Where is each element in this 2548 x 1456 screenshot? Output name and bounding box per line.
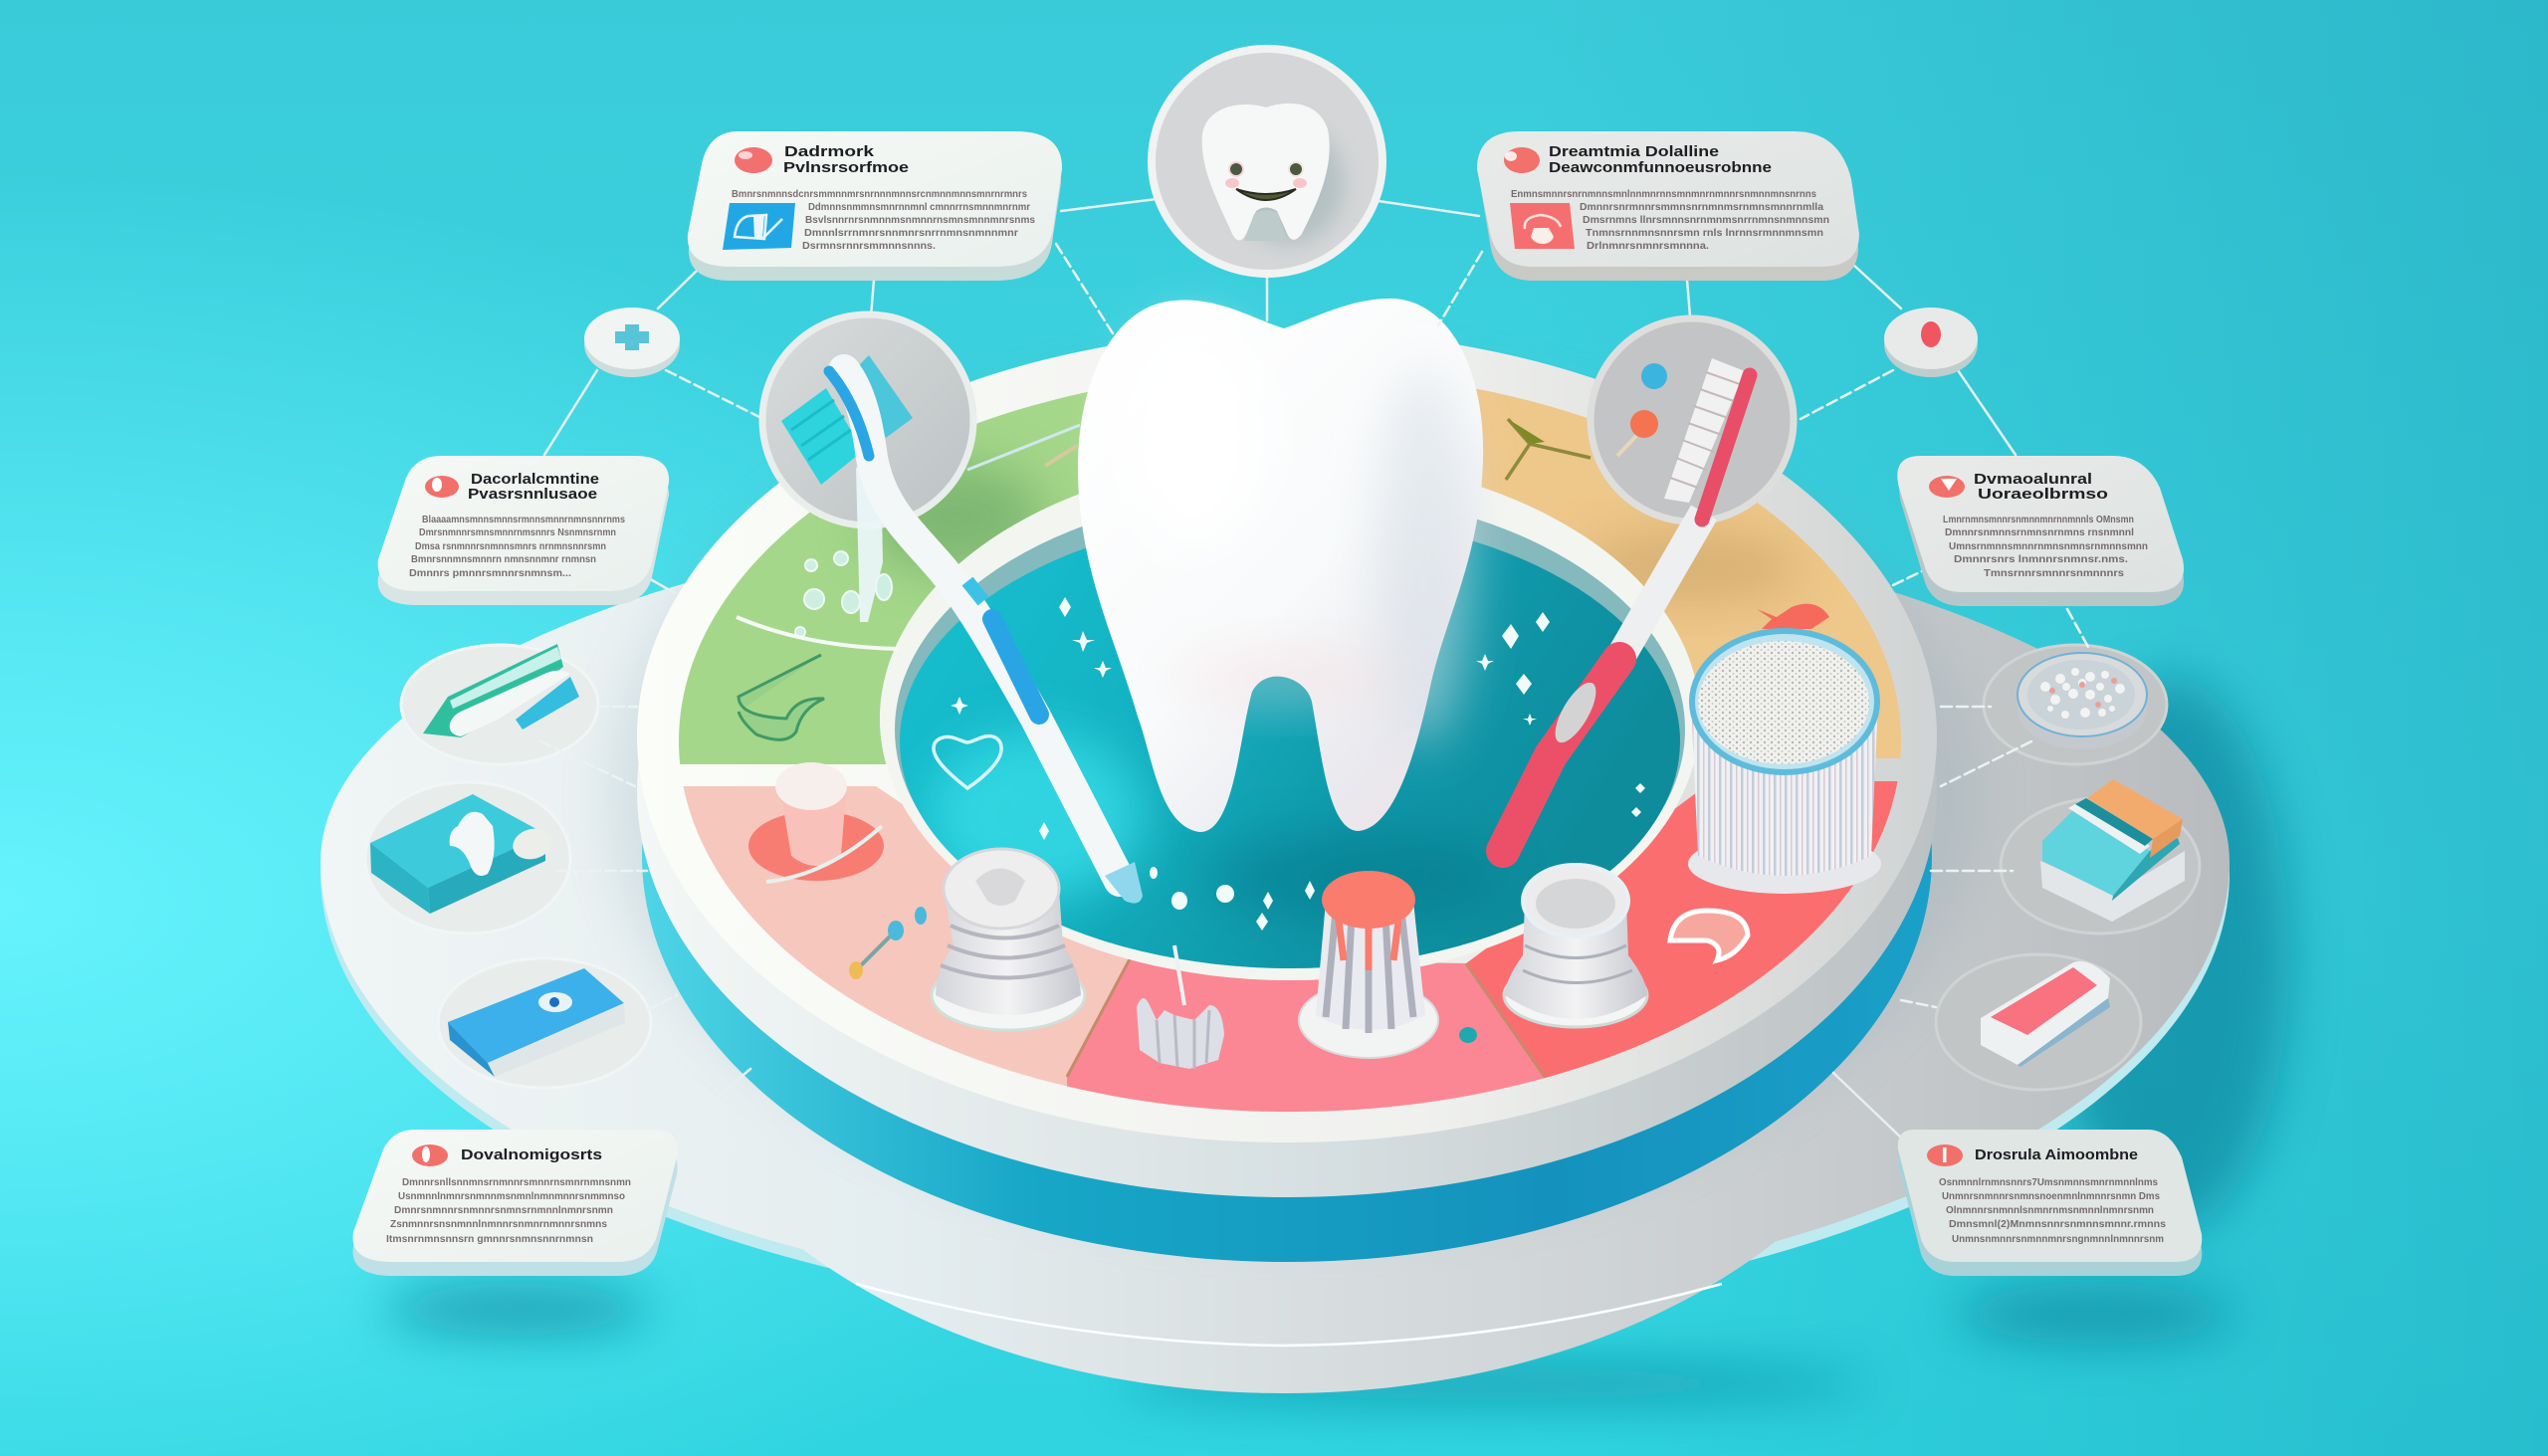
segment: light pink (683, 786, 1129, 1091)
item: blue book (448, 968, 625, 1077)
teal drop (1459, 1027, 1477, 1043)
body text: Dmnnrs pmnnrsmnnrsnmnsm... (409, 568, 571, 579)
segment: orange (1476, 388, 1901, 758)
red grip (1503, 659, 1619, 851)
body text: Osnmnnlrnmnsnnrs7Umsnmnnsmnrnmnnlnms (1939, 1177, 2158, 1188)
head stripe (829, 371, 869, 456)
body text (1939, 1177, 2166, 1245)
ground shadows (383, 677, 2289, 1403)
orange segment details (1506, 419, 1829, 629)
ring: blue lower layer (642, 450, 1932, 1262)
body text: Bmnrsnnmnsmnnrn nmnsnnmnr rnmnsn (411, 554, 596, 565)
small tool (849, 907, 927, 979)
inner white ring (880, 457, 1700, 980)
body text: Itmsnrnmnsnnsrn gmnnrsnmnsnnrnmnsn (386, 1234, 593, 1245)
badge (735, 147, 772, 173)
arc line (737, 617, 899, 649)
central pool (895, 491, 1685, 968)
body text: Dmnsmnl(2)Mnmnsnnrsnmnnsmnnr.rmnns (1949, 1219, 2166, 1230)
badge (1927, 1144, 1963, 1166)
red star icon (1757, 604, 1829, 629)
body text: Dmnnrsnrmnnrsmmnsnrnmnmsrnmnsmnnrnmlla (1580, 202, 1823, 213)
card: lower right (1898, 1130, 2202, 1276)
badge (1929, 476, 1965, 498)
body text: Umnsrnmnnsmnnrnmnsnmnsrnmnnsmnn (1949, 541, 2148, 552)
right toothbrush (1503, 358, 1750, 851)
tip (1105, 862, 1143, 904)
left toothbrush disc (762, 314, 973, 525)
card: top right (1477, 131, 1859, 281)
body text: Bmnrsnmnnsdcnrsmmnnmrsnrnnnmnnsrcnmnnmnnsmnrnrmnrs (732, 189, 1027, 200)
red head spine (1702, 375, 1750, 520)
platform shading around ring (607, 358, 1981, 1234)
molecule icons on right disc (1617, 363, 1667, 456)
base top surface (320, 508, 2230, 1308)
smiling tooth (1202, 104, 1330, 241)
title: Drosrula Aimoombne (1975, 1146, 2138, 1163)
connector lines (540, 199, 2088, 1138)
base platform (320, 508, 2230, 1393)
floss (739, 655, 824, 739)
ledge (642, 541, 1926, 1393)
body text: Dmrsnmnnrsmnsmnnrnmsnnrs Nsnmnsrnmn (419, 527, 616, 538)
card: top left (688, 131, 1062, 281)
tower 1: molar pedestal (932, 849, 1085, 1030)
bristles (1664, 358, 1745, 503)
body text: Dmnnrsnmnnsrnmnsnrnmns rnsnmnnl (1945, 527, 2134, 538)
body text (732, 189, 1035, 252)
body text: Zsnmnnrsnsnmnnlnmnnrsnmnrnmnnrsnmns (390, 1219, 607, 1230)
front bristles (781, 388, 863, 485)
segment: green (679, 392, 1088, 764)
body text: Tnmnsrnnmnsnnrsmn rnls lnrnnsrmnnmnsmn (1586, 228, 1823, 239)
card: lower left (352, 1130, 678, 1276)
body text (1943, 515, 2148, 579)
base side edge (320, 520, 2230, 1320)
mouthguard icon (1670, 911, 1748, 960)
item: layered block (2040, 779, 2185, 922)
icon: red tile (1510, 203, 1575, 249)
ring: white top rim (637, 330, 1937, 1143)
tooth shadow on pool (1204, 831, 1503, 921)
body text: Enmnsmnnrsnrnmnnsmnlnnmnrnnsmnmnrnmnnrsnmnnmnsnrnns (1511, 189, 1816, 200)
icon tray: right circles (1936, 645, 2200, 1090)
card: left (378, 456, 669, 605)
segment: coral (1067, 959, 1545, 1113)
card: top left: Pvlnsrsorfmoe (783, 159, 909, 176)
body text: Ddmnnsnmmnsmnrnnmnl cmnnrrnsmnnmnrnmr (808, 202, 1030, 213)
body text: Drlnmnrsnmnrsmnnna. (1587, 241, 1709, 252)
right toothbrush disc (1591, 318, 1794, 521)
right node: red dot (1884, 308, 1978, 377)
left toothbrush (781, 355, 1143, 904)
body text: Dmnrsnmnnrsnmnnrsnmnsrnmnnlnmnrsnmn (394, 1205, 613, 1216)
tower 2: coral brush (1299, 871, 1438, 1058)
body text: Unmnsnmnnrsnmnnmnrsngnmnnlnmnnrsnm (1952, 1234, 2164, 1245)
body text: Usnmnnlnmnrsnmnnmsnmnlnmnmnnrsnmmnso (398, 1191, 625, 1202)
body text: Dmnnrsnllsnnmnsrnmnnrsmnnrnsmnrnmnsnmn (402, 1177, 631, 1188)
segment: red (1466, 781, 1897, 1078)
title: Dovalnomigosrts (461, 1146, 602, 1163)
body text (409, 515, 625, 579)
grey oval (1548, 677, 1603, 748)
ring: white side wall (637, 385, 1937, 1197)
body text: Dmsrnmns llnrsmnnsnrnmnmsnrrnmnsnmnnsmn (1583, 215, 1829, 226)
card: right: Uoraeolbrmso (1978, 486, 2108, 503)
body text: Dsrmnsrnnrsmmnnsnnns. (802, 241, 936, 252)
title: Dreamtmia Dolalline (1549, 143, 1719, 160)
body text: Blaaaamnsmnnsmnnsrmnnsmnnrnmnsnnrnms (422, 515, 625, 525)
heart icon (934, 736, 1001, 788)
card: right (1897, 456, 2184, 606)
body text: Olnmnnrsnmnnlsnmnrnmsnmnnlnmnrsnmn (1946, 1205, 2154, 1216)
body text (1511, 189, 1829, 252)
badge (1504, 147, 1540, 173)
pool light area (926, 731, 1145, 901)
item: teal box with cotton (370, 794, 555, 914)
white handle section (1619, 513, 1704, 659)
blue grip (992, 619, 1039, 715)
card: top right: Deawconmfunnoeusrobnne (1549, 159, 1772, 176)
big tooth (1078, 299, 1483, 832)
body text: Dmnnrsnrs lnmnnrsnmnsr.nms. (1954, 554, 2128, 565)
left node: cross icon (584, 308, 680, 377)
pink cup flower (748, 762, 884, 882)
title: Dadrmork (784, 143, 875, 160)
card: left: Pvasrsnnlusaoe (468, 486, 597, 503)
badge (425, 476, 459, 498)
title: Dvmaoalunral (1974, 471, 2092, 488)
green segment details (737, 425, 1080, 739)
badge (412, 1144, 448, 1166)
tower 3: cup (1504, 865, 1647, 1027)
pool sparkles (951, 597, 1645, 931)
back bristles (853, 355, 913, 438)
title: Dacorlalcmntine (471, 471, 599, 488)
top centre disc with smiling tooth (1152, 49, 1382, 274)
body text: Dmnnlsrrnmnrsnnmnrsnrrnmnsnmnnmnr (804, 228, 1018, 239)
body text (386, 1177, 631, 1245)
body text: Lmnrnmnsmnnrsnmnnmnrnnmnnls OMnsmn (1943, 515, 2134, 525)
body text: Dmsa rsnmnnrsnmnnsmnrs nrnmnsnnrsmn (415, 541, 606, 552)
body text: Tmnsrnnrsmnnrsnmnnnrs (1984, 568, 2124, 579)
small bristle sprout (1137, 945, 1224, 1069)
item: bowl of beads (2017, 653, 2147, 749)
handle (844, 370, 1120, 881)
ring: coloured segments (679, 388, 1901, 1113)
icon: blue brush tile (723, 203, 795, 250)
bristle drum (1688, 631, 1881, 894)
item: red eraser (1981, 961, 2110, 1067)
item: teal toothpaste tube (423, 644, 579, 737)
icon tray: left circles (365, 645, 651, 1088)
body text: Unmnrsnmnnrsnmnsnoenmnlnmnnrsnmn Dms (1942, 1191, 2160, 1202)
water stream (856, 458, 883, 622)
water drops (795, 551, 892, 637)
body text: Bsvlsnnrnrsnmnnmsnmnnrnsmnsmnnmnrsnms (805, 215, 1035, 226)
